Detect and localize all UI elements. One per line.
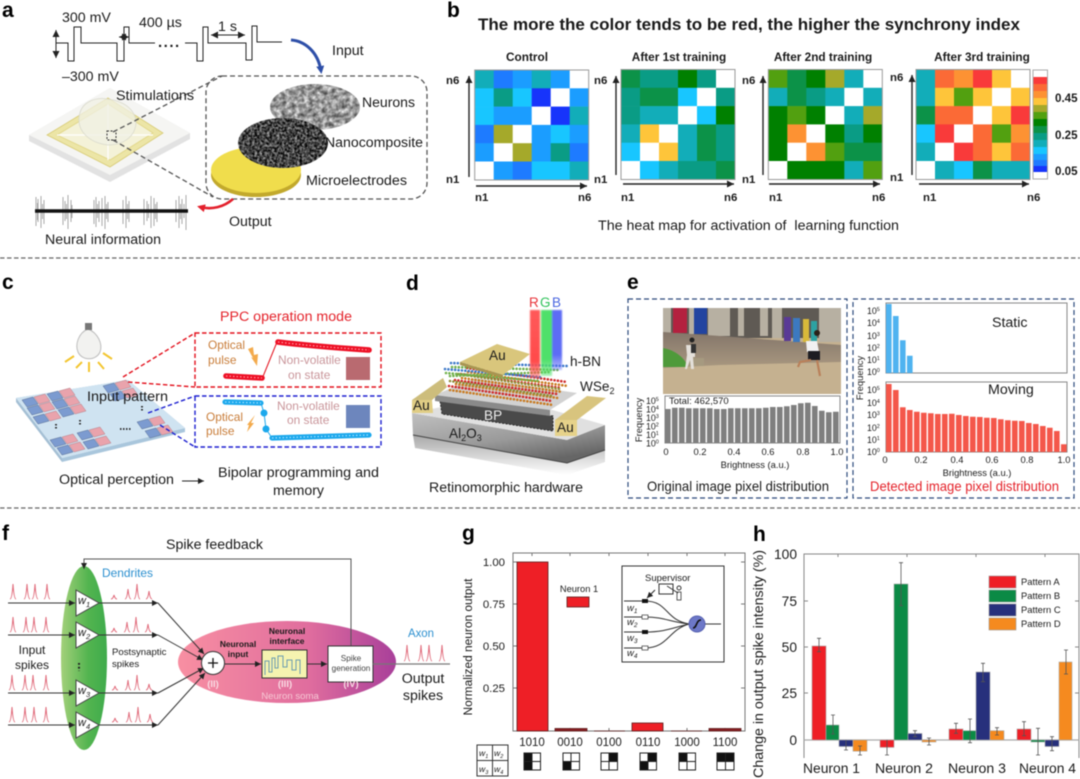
device chip (29, 88, 190, 182)
detected histogram axes: 0.2 (914, 454, 928, 465)
postsynaptic spikes (111, 584, 153, 722)
detected histogram axes: 5 (877, 307, 880, 313)
detected histogram axes: 5 (877, 386, 880, 392)
RGB labels: B (552, 295, 561, 310)
layer labels: 2 (461, 433, 466, 443)
neuronal interface label (269, 626, 305, 646)
summation node (202, 652, 224, 674)
original histogram axes: 0.2 (693, 446, 707, 457)
axis labels n1 n6: n6 (578, 192, 591, 204)
layer labels: Al (449, 426, 461, 441)
dendrites ellipse (61, 566, 107, 750)
detected histogram axes: 0.8 (1020, 454, 1034, 465)
RGB labels: R (529, 295, 539, 310)
supervisor inset: w (627, 603, 634, 614)
x tick labels: 0100 (596, 737, 622, 749)
neuron soma label: Neuron soma (261, 691, 319, 702)
axis labels n1 n6: n1 (923, 192, 937, 204)
x tick labels: 0010 (557, 737, 583, 749)
PPC heading: PPC operation mode (220, 309, 352, 325)
output spikes label: spikes (403, 688, 443, 704)
legend: Pattern D (1021, 618, 1061, 629)
spike generation box (328, 646, 373, 682)
colour scale labels: 0.05 (1055, 165, 1078, 178)
axis labels n1 n6: n1 (890, 172, 904, 184)
axis labels n1 n6: n1 (742, 174, 756, 186)
moving histogram: Moving (988, 382, 1034, 398)
detected histogram axes: 10 (867, 423, 877, 433)
heat map control (475, 70, 589, 180)
axis labels n1 n6: n1 (769, 192, 783, 204)
y tick labels: 100 (774, 547, 797, 562)
original histogram axes (633, 396, 844, 470)
left dashed frame (628, 299, 847, 498)
original histogram axes: 10 (646, 422, 656, 432)
y tick labels: 75 (782, 594, 797, 609)
neuron labels: Neuron 4 (1019, 760, 1076, 776)
heat map after 1st training (621, 70, 735, 180)
supervisor inset: w (627, 617, 634, 628)
layer labels: Nanocomposite (325, 135, 423, 151)
output arrow (200, 199, 233, 208)
detected histogram axes: 10 (867, 385, 877, 395)
axis labels n1 n6: n6 (446, 75, 459, 87)
detected histogram axes: 10 (867, 447, 877, 457)
pattern C bars (839, 672, 1059, 746)
postsynaptic label (112, 647, 167, 670)
panel a: neural stimulation device (2, 0, 427, 248)
zero line (804, 739, 1079, 741)
original histogram axes: 0.4 (727, 446, 741, 457)
neuron 1 legend: Neuron 1 (560, 584, 598, 594)
red dashed box (123, 333, 381, 387)
axis labels n1 n6: n1 (475, 192, 489, 204)
axis labels n1 n6: n6 (594, 75, 607, 87)
layer labels: BP (484, 408, 502, 423)
input spikes label: spikes (15, 658, 49, 672)
RGB beams (530, 310, 562, 378)
spike generation box: generation (332, 664, 371, 673)
layer labels: Au (413, 398, 430, 413)
supervisor inset: 3 (634, 638, 638, 645)
heat map titles: After 1st training (632, 50, 726, 64)
supervisor inset: 1 (634, 608, 638, 615)
detected histogram axes: 3 (877, 411, 880, 417)
neuron labels: Neuron 2 (875, 760, 933, 776)
colour scale labels: 0.45 (1055, 92, 1078, 105)
non-volatile labels: on state (288, 368, 331, 382)
supervisor inset: 2 (633, 622, 638, 629)
colour scale labels: 0.25 (1055, 129, 1078, 142)
dendrites label: Dendrites (102, 566, 153, 580)
original histogram axes: 0.6 (761, 446, 775, 457)
static histogram (886, 303, 1067, 373)
input spikes label: Input (19, 643, 46, 657)
synapse triangles: 2 (85, 632, 91, 641)
output spikes (404, 645, 445, 661)
layer labels: 2 (609, 386, 614, 396)
heat map after 2nd training (768, 70, 882, 180)
synapse triangles: 4 (86, 722, 90, 731)
label f: f (2, 522, 10, 545)
supervisor inset: w (627, 648, 634, 659)
label g: g (462, 522, 475, 545)
waveform labels: 300 mV (62, 10, 111, 26)
y tick labels: 0.75 (483, 599, 505, 611)
original histogram axes: 10 (646, 404, 656, 414)
detected histogram axes: 1 (877, 356, 880, 362)
panel c captions: Bipolar programming and (218, 465, 379, 481)
neural information label: Neural information (45, 232, 161, 248)
moving histogram (886, 382, 1067, 452)
y tick labels: 1.00 (483, 557, 505, 569)
optical pulse labels: Optical (206, 410, 243, 424)
panel f: artificial neuron schematic (2, 522, 450, 750)
heat map titles: Control (506, 50, 548, 64)
detected histogram axes: 0 (882, 454, 888, 465)
detected histogram axes: 0.4 (950, 454, 964, 465)
neuronal interface label: interface (270, 636, 305, 646)
stage numerals: (III) (278, 679, 292, 690)
detected histogram axes: 0.6 (985, 454, 999, 465)
pattern A bars (812, 646, 1031, 747)
detected histogram axes: 1.0 (1057, 454, 1071, 465)
panel h: change in output spike intensity chart (750, 523, 1079, 778)
neural signal trace (35, 195, 188, 230)
output bars (517, 562, 741, 731)
original histogram axes: Brightness (a.u.) (721, 459, 789, 470)
pattern icons (524, 753, 734, 770)
neuron labels: Neuron 1 (803, 760, 860, 776)
legend: Pattern B (1021, 590, 1060, 601)
waveform labels: .... (158, 34, 181, 51)
legend (989, 576, 1061, 630)
detected histogram axes: 2 (877, 344, 880, 350)
nanocomposite disc (238, 118, 328, 168)
heat map titles: After 3rd training (934, 50, 1030, 64)
original histogram axes: 10 (646, 413, 656, 423)
waveform labels (62, 10, 237, 85)
axon label: Axon (408, 626, 434, 640)
synapse triangles: w (78, 717, 86, 729)
original histogram axes: 0.8 (796, 446, 810, 457)
optical pulse labels: pulse (206, 424, 235, 438)
detected histogram axes (854, 306, 1071, 478)
heat map titles (506, 50, 1030, 64)
heat map caption: The heat map for activation of learning function (598, 218, 899, 234)
device substrate (412, 395, 605, 475)
zoom dashed outline (113, 76, 427, 199)
static histogram: Static (992, 315, 1027, 331)
panel d: retinomorphic hardware (406, 272, 614, 496)
neuronal input label: input (228, 649, 248, 659)
detected histogram axes: 10 (867, 398, 877, 408)
waveform labels: –300 mV (62, 69, 119, 85)
layer labels: h-BN (570, 354, 601, 369)
label d: d (406, 272, 419, 295)
sensor array plate (16, 380, 185, 462)
original histogram axes: 10 (646, 438, 656, 448)
axis labels n1 n6 (446, 72, 1040, 204)
weight key: 4 (500, 770, 503, 776)
detected histogram axes: 10 (867, 367, 877, 377)
campus photo (663, 308, 841, 394)
original histogram: Total: 462,570 (669, 396, 729, 407)
detected histogram axes: Brightness (a.u.) (943, 467, 1011, 478)
non-volatile labels: Non-volatile (278, 353, 341, 367)
detected histogram axes: 10 (867, 410, 877, 420)
neuron labels: Neuron 3 (948, 760, 1006, 776)
input spikes (9, 584, 50, 722)
panel c: optical perception (2, 271, 381, 499)
RGB labels (529, 295, 561, 310)
original histogram axes: 1 (656, 431, 659, 437)
lightning icons (247, 347, 258, 432)
gold contacts (412, 344, 606, 436)
original caption: Original image pixel distribution (647, 478, 829, 494)
layer labels: O (466, 426, 477, 441)
heat map titles: After 2nd training (774, 50, 872, 64)
optical pulse labels (206, 338, 245, 438)
microelectrode disc (211, 147, 301, 197)
input label: Input (332, 43, 364, 59)
postsynaptic label: spikes (112, 659, 139, 670)
panel g: normalized neuron output chart (462, 522, 745, 776)
spike generation box: Spike (341, 654, 362, 663)
axis labels n1 n6: n6 (1027, 192, 1040, 204)
synapse triangles: w (78, 595, 86, 607)
y tick labels (483, 557, 505, 695)
waveform labels: 1 s (218, 19, 237, 35)
stimulation waveform (56, 26, 282, 61)
neuronal input label (220, 639, 256, 659)
detected histogram axes: 0 (877, 368, 880, 374)
x tick labels: 1000 (674, 737, 700, 749)
blue on-state curve (225, 402, 369, 438)
panel b: heat maps (446, 0, 1078, 234)
weight key (477, 745, 508, 776)
axon line (373, 663, 450, 665)
legend: Pattern A (1021, 576, 1060, 587)
original histogram axes: 1.0 (830, 446, 844, 457)
original histogram axes: 3 (656, 414, 659, 420)
input pattern label: Input pattern (87, 389, 168, 405)
axis labels n1 n6: n6 (872, 192, 885, 204)
supervisor inset: Supervisor (645, 573, 690, 584)
panel c captions: Optical perception (59, 472, 174, 488)
right dashed frame (853, 299, 1074, 498)
neuronal interface label: Neuronal (269, 626, 305, 636)
plot frame (804, 554, 1079, 758)
detected histogram axes: 10 (867, 306, 877, 316)
optical pulse labels: Optical (208, 338, 245, 352)
legend: Pattern C (1021, 604, 1061, 615)
detected histogram axes: 10 (867, 331, 877, 341)
state swatches (346, 357, 370, 428)
heat map after 3rd training (916, 70, 1030, 180)
axis labels n1 n6: n1 (446, 174, 460, 186)
layer labels (413, 348, 614, 443)
layer labels: WSe (580, 379, 609, 394)
neuron soma ellipse (178, 621, 396, 703)
y tick labels: 0.50 (483, 641, 505, 653)
heat map title: The more the color tends to be red, the higher the synchrony index (478, 15, 1021, 34)
postsynaptic label: Postsynaptic (112, 647, 167, 658)
axis arrows (469, 75, 1029, 186)
synapse triangles: w (78, 627, 86, 639)
spike feedback label: Spike feedback (166, 537, 264, 553)
input spikes label (15, 643, 49, 672)
label e: e (627, 271, 639, 294)
y tick labels: 50 (782, 640, 797, 655)
y tick labels (774, 547, 797, 748)
non-volatile labels: Non-volatile (277, 399, 340, 413)
detected histogram axes: 2 (877, 424, 880, 430)
detected histogram axes: 10 (867, 435, 877, 445)
weight key: w (494, 764, 500, 774)
non-volatile labels (277, 353, 341, 427)
RGB labels: G (540, 295, 551, 310)
layer labels: Microelectrodes (306, 173, 407, 189)
x tick labels: 1100 (713, 737, 737, 749)
weight key: w (479, 764, 485, 774)
output spikes label (402, 671, 444, 704)
light bulb (65, 323, 112, 372)
panel c captions: memory (273, 483, 325, 499)
weight key: 3 (485, 770, 489, 776)
detected histogram axes: 1 (877, 436, 880, 442)
original histogram axes: 0 (656, 440, 659, 446)
layer labels: Neurons (362, 95, 415, 111)
molecules (445, 363, 568, 405)
neuronal input label: Neuronal (220, 639, 256, 649)
detected histogram axes: Frequency (854, 356, 865, 400)
pattern B bars (826, 584, 1045, 742)
y tick labels: 0.25 (483, 683, 505, 695)
error bars (817, 563, 1068, 755)
stage numerals (207, 679, 359, 690)
layer labels: Au (557, 420, 574, 435)
supervisor inset (622, 566, 724, 662)
axis labels n1 n6: n6 (724, 192, 737, 204)
synapse triangles: 3 (86, 690, 91, 699)
axis labels n1 n6: n6 (742, 75, 755, 87)
synapse triangles (76, 590, 99, 738)
layer labels: Stimulations (116, 88, 194, 104)
x tick labels: 1010 (519, 737, 545, 749)
y tick labels: 0 (789, 733, 797, 748)
waveform labels: 400 µs (139, 15, 182, 31)
x tick labels: 0110 (636, 737, 660, 749)
synapse triangles: w (78, 685, 86, 697)
x tick labels (519, 737, 737, 749)
supervisor inset: 4 (634, 653, 638, 660)
original histogram axes: 2 (656, 422, 659, 428)
blue dashed box (148, 396, 381, 447)
original histogram axes: Frequency (633, 398, 644, 442)
original histogram axes: 5 (656, 397, 659, 403)
detected histogram axes: 3 (877, 332, 880, 338)
weight key: 2 (499, 754, 503, 760)
original histogram (665, 396, 840, 443)
layer labels (116, 88, 423, 189)
layer labels: 3 (477, 433, 482, 443)
neuron 1 legend (560, 584, 598, 607)
detected histogram axes: 10 (867, 355, 877, 365)
detected caption: Detected image pixel distribution (870, 478, 1059, 494)
supervisor inset: w (627, 633, 634, 644)
output spikes label: Output (402, 671, 444, 687)
layer labels: Au (489, 348, 506, 363)
neurons disc (270, 84, 360, 130)
synapse triangles: 1 (86, 600, 90, 609)
weight key: w (494, 748, 500, 758)
detected histogram axes: 0 (877, 448, 880, 454)
axis labels n1 n6: n6 (890, 72, 903, 84)
stage numerals: (II) (207, 679, 219, 690)
panel e: image pixel distribution (627, 271, 1074, 498)
detected histogram axes: 4 (877, 399, 880, 405)
label h: h (753, 523, 766, 546)
pattern D bars (853, 662, 1072, 751)
output label: Output (229, 214, 272, 230)
original histogram axes: 4 (656, 406, 659, 412)
y axis title: Change in output spike intensity (%) (750, 550, 766, 778)
BP layer (440, 401, 553, 431)
spike feedback line (84, 559, 351, 646)
colour scale labels (1055, 92, 1078, 178)
neuron labels (803, 760, 1076, 776)
red on-state curve (226, 342, 369, 379)
non-volatile labels: on state (287, 413, 330, 427)
arrows in soma (225, 663, 327, 665)
colour scale bar (1033, 70, 1048, 179)
stage numerals: (IV) (343, 679, 359, 690)
weight key: w (479, 748, 485, 758)
weight key: 1 (485, 754, 488, 760)
y tick labels: 25 (782, 686, 797, 701)
input arrow (291, 40, 321, 71)
label c: c (2, 271, 14, 294)
axis labels n1 n6: n1 (594, 174, 608, 186)
detected histogram axes: 4 (877, 319, 880, 325)
plot frame (513, 553, 745, 731)
panel c captions (59, 465, 379, 499)
neuronal interface box (262, 650, 307, 678)
y axis title: Normalized neuron output (463, 578, 475, 716)
panel d caption: Retinomorphic hardware (429, 480, 583, 496)
detected histogram axes: 10 (867, 318, 877, 328)
axis labels n1 n6: n1 (621, 192, 635, 204)
optical pulse labels: pulse (208, 353, 237, 367)
original histogram axes: 10 (646, 430, 656, 440)
input and dendrite lines (8, 603, 205, 725)
detected histogram axes: 10 (867, 343, 877, 353)
gray plate (435, 378, 577, 416)
original histogram axes: 10 (646, 396, 656, 406)
original histogram axes: 0 (663, 446, 669, 457)
